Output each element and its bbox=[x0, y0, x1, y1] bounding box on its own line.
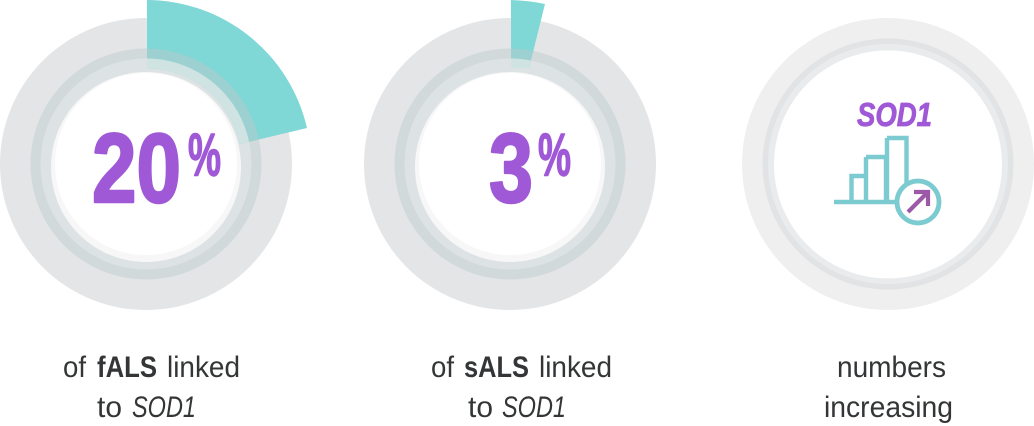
caption: of fALS linked to SOD1: to bbox=[97, 391, 122, 424]
value: 3%: % bbox=[538, 122, 571, 188]
caption: numbers increasing: increasing bbox=[824, 391, 953, 424]
caption: of fALS linked to SOD1: of bbox=[63, 351, 87, 384]
panel: 20% of fALS bbox=[0, 0, 307, 424]
wedge: 20 percent bbox=[147, 0, 307, 144]
value: 3%: 3 bbox=[489, 113, 533, 223]
value: 3% bbox=[489, 113, 571, 223]
caption: of fALS linked to SOD1: fALS bbox=[97, 351, 157, 384]
donut chart: 20 percent bbox=[0, 0, 307, 310]
caption: of sALS linked to SOD1: linked bbox=[539, 351, 612, 384]
caption: numbers increasing: numbers bbox=[837, 351, 946, 384]
caption: of fALS linked to SOD1: linked bbox=[167, 351, 240, 384]
ring: light donut bbox=[742, 18, 1034, 310]
caption: of sALS linked to SOD1: SOD1 bbox=[502, 391, 566, 424]
caption: of sALS linked to SOD1: of bbox=[431, 351, 455, 384]
panel: 3% of sALS bbox=[364, 0, 656, 424]
donut chart: 3 percent bbox=[364, 0, 656, 310]
wedge: 3 percent bbox=[511, 0, 545, 68]
icon: bar chart with rising arrow bbox=[834, 138, 939, 223]
caption: of fALS linked to SOD1: SOD1 bbox=[132, 391, 196, 424]
label: SOD1: SOD1 bbox=[857, 96, 932, 133]
caption: of sALS linked to SOD1 bbox=[431, 351, 612, 424]
value: 20%: 20 bbox=[92, 113, 181, 223]
value: 20%: % bbox=[188, 122, 221, 188]
panel: SOD1 numbers increasing bbox=[742, 18, 1034, 424]
caption: of sALS linked to SOD1: to bbox=[468, 391, 493, 424]
caption: of sALS linked to SOD1: sALS bbox=[464, 351, 529, 384]
caption: numbers increasing bbox=[824, 351, 953, 424]
caption: of fALS linked to SOD1 bbox=[63, 351, 240, 424]
